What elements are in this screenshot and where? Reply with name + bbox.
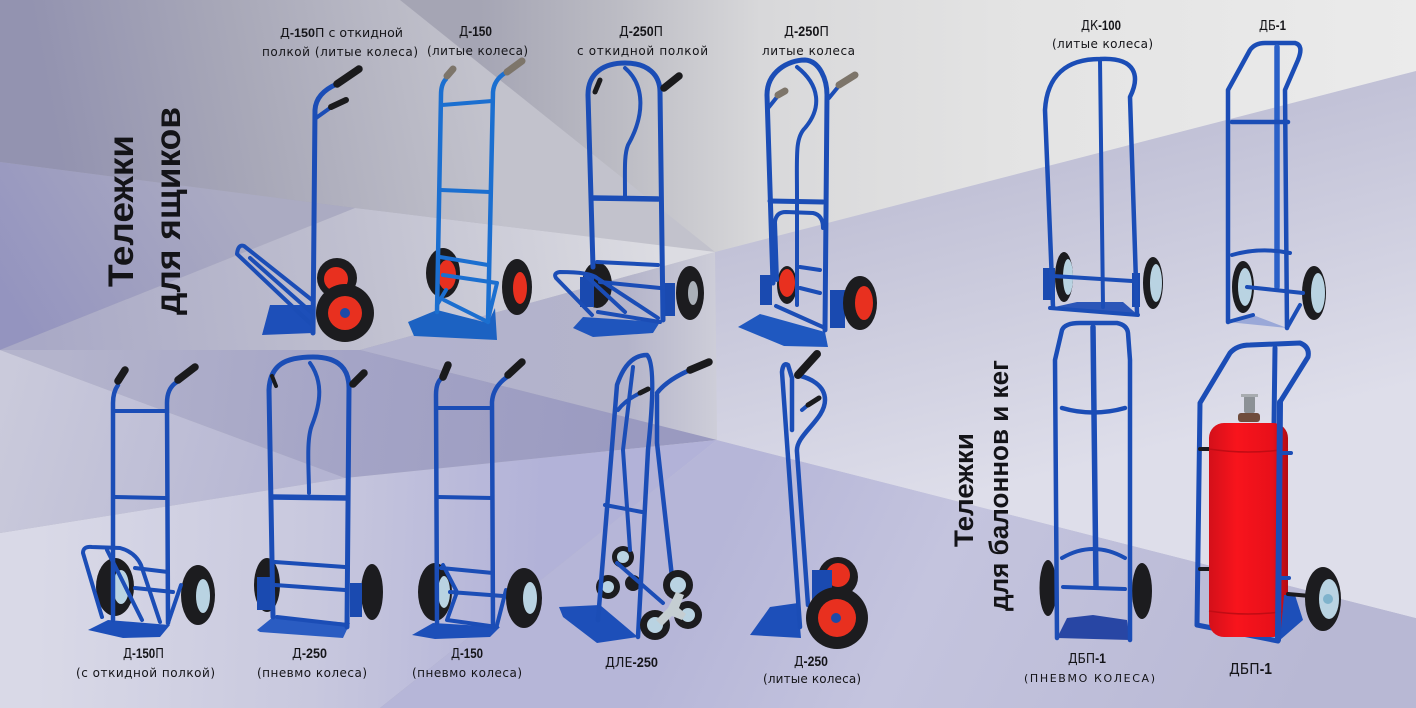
cart: Д-250П folding shelf (555, 63, 704, 337)
label: ДК-100 (литые колеса): (литые колеса) (1052, 37, 1153, 51)
label: Д-250 (пневмо колеса) (257, 646, 367, 680)
label: Д-250 (пневмо колеса): (пневмо колеса) (257, 666, 367, 680)
label: Д-250 (литые колеса) (763, 654, 861, 686)
cart: Д-250П cast wheels (738, 60, 877, 347)
title: Тележки для ящиков: Тележки (102, 135, 141, 287)
cart: ДК-100 (1043, 59, 1163, 315)
label: ДЛЕ-250: ДЛЕ-250 (605, 655, 658, 671)
title: Тележки для балоннов и кег: для балоннов и кег (984, 360, 1014, 611)
label: ДБП-1 (пневмо колеса): (ПНЕВМО КОЛЕСА) (1024, 672, 1155, 685)
label: Д-150 (литые колеса): (литые колеса) (427, 44, 528, 58)
label: Д-150П с откидной полкой (литые колеса): полкой (литые колеса) (262, 45, 418, 59)
title: Тележки для балоннов и кег: Тележки (949, 433, 979, 547)
label: Д-250 (литые колеса): Д-250 (794, 654, 828, 670)
label: ДБП-1: ДБП-1 (1229, 660, 1272, 678)
label: Д-250П с откидной полкой: Д-250П (619, 24, 663, 40)
label: Д-250П с откидной полкой: с откидной полкой (577, 44, 708, 58)
label: Д-150П с откидной полкой (литые колеса): Д-150П с откидной (280, 26, 403, 40)
cart: ДЛЕ-250 stair climber (559, 355, 709, 643)
cart: ДБ-1 (1228, 43, 1326, 328)
label: Д-150П (с откидной полкой): (с откидной полкой) (76, 666, 215, 680)
label: Д-250 (литые колеса): (литые колеса) (763, 672, 861, 686)
label: Д-150 (литые колеса): Д-150 (459, 24, 492, 40)
cart: Д-150 cast wheels (408, 61, 532, 340)
label: ДК-100 (литые колеса) (1052, 18, 1153, 51)
label: ДК-100 (литые колеса): ДК-100 (1081, 18, 1121, 34)
title: Тележки для балоннов и кег (949, 360, 1014, 611)
label: Д-250П литые колеса (762, 24, 855, 58)
cart: ДБП-1 pneumatic (1040, 323, 1152, 640)
cart: Д-250 pneumatic (254, 357, 383, 638)
cart: Д-150 pneumatic (412, 362, 542, 639)
label: ДБ-1: ДБ-1 (1259, 18, 1286, 34)
label: ДБП-1 (пневмо колеса) (1024, 651, 1155, 685)
title: Тележки для ящиков: для ящиков (149, 107, 188, 315)
cart: Д-150П folding shelf, cast wheels (237, 69, 374, 342)
label: Д-150 (пневмо колеса): (пневмо колеса) (412, 666, 522, 680)
label: Д-250П литые колеса: литые колеса (762, 44, 855, 58)
label: Д-150П (с откидной полкой): Д-150П (123, 646, 164, 662)
label: Д-150П с откидной полкой (литые колеса) (262, 26, 418, 59)
label: Д-250 (пневмо колеса): Д-250 (292, 646, 327, 662)
cart: Д-250 side view, cast wheels (750, 354, 868, 649)
label: Д-150 (пневмо колеса): Д-150 (451, 646, 483, 662)
label: ДБП-1 (пневмо колеса): ДБП-1 (1068, 651, 1106, 667)
label: Д-150 (литые колеса) (427, 24, 528, 58)
label: Д-250П литые колеса: Д-250П (784, 24, 829, 40)
cart: ДБП-1 with red cylinder (1197, 343, 1341, 641)
red gas cylinder (1209, 394, 1288, 637)
cart: Д-150П pneumatic (83, 367, 215, 638)
label: Д-250П с откидной полкой (577, 24, 708, 58)
title: Тележки для ящиков (102, 107, 188, 315)
label: Д-150 (пневмо колеса) (412, 646, 522, 680)
label: Д-150П (с откидной полкой) (76, 646, 215, 680)
